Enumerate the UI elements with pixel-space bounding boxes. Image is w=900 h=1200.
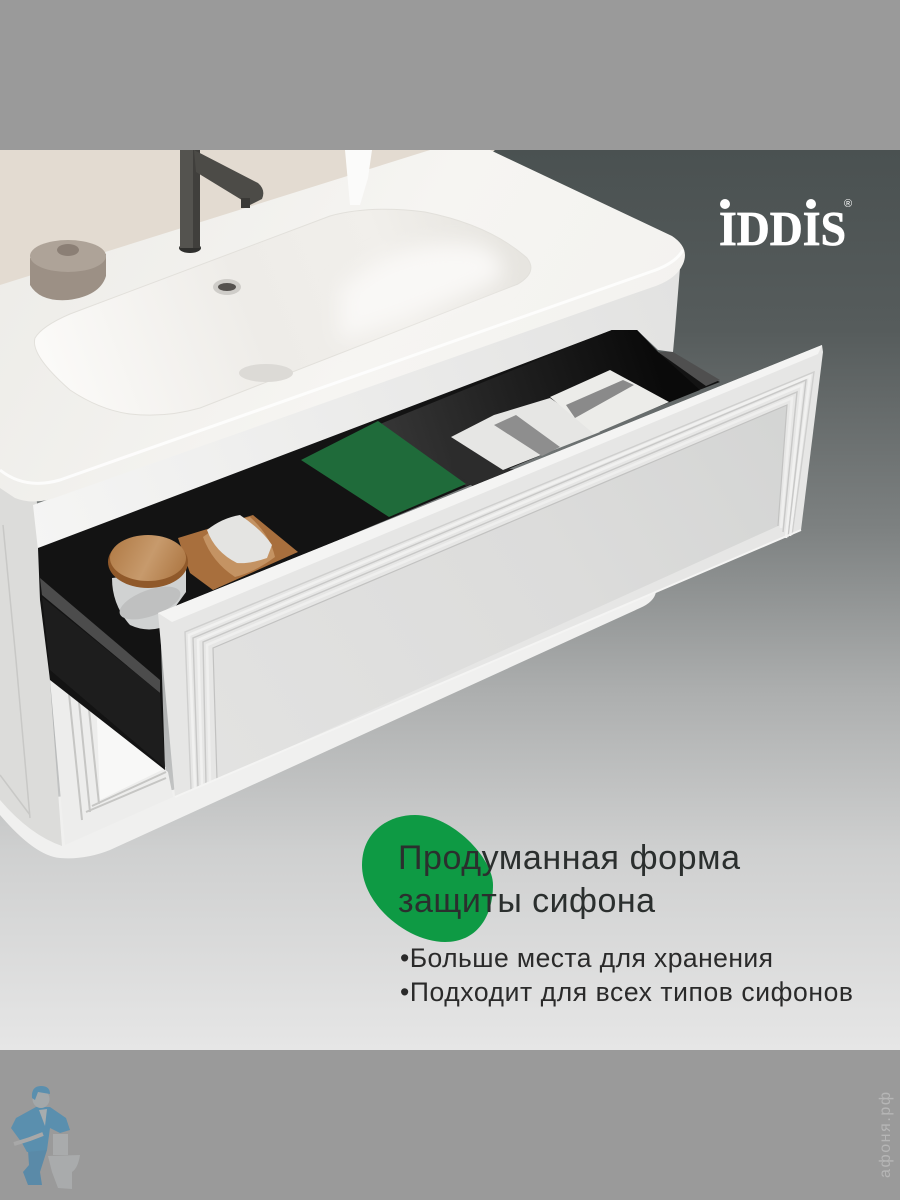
plumber shirt (39, 1109, 47, 1126)
bullet list (400, 943, 853, 1007)
towels (451, 370, 669, 492)
drawer side runner (40, 578, 160, 693)
icon: plumber with toilet (11, 1086, 80, 1189)
cabinet base shelf (0, 578, 656, 858)
bullet 1: •Больше места для хранения (400, 943, 773, 973)
green blob (362, 815, 493, 942)
back wall of drawer (380, 330, 700, 486)
drawer interior (38, 330, 720, 770)
wrench (14, 1134, 43, 1144)
top lip (158, 345, 822, 622)
counter front edge highlight (0, 250, 683, 483)
overflow (213, 279, 241, 295)
plumber head (32, 1086, 50, 1108)
heading line 2: защиты сифона (398, 882, 655, 920)
right runner (658, 352, 720, 386)
white faucet (345, 150, 372, 205)
top gray band (0, 0, 900, 150)
hair brush (203, 515, 275, 577)
storage jar (108, 535, 188, 629)
carcass band (33, 268, 680, 550)
drawer side (42, 597, 165, 768)
green divider (301, 421, 466, 517)
bullet 2: •Подходит для всех типов сифонов (400, 977, 853, 1007)
logo: IDDIS (719, 198, 852, 256)
wash basin (34, 209, 531, 415)
logo dot right (806, 199, 816, 209)
toilet (48, 1134, 80, 1189)
taupe container (30, 240, 106, 300)
bottom gray band (0, 1050, 900, 1200)
cabinet side panel (0, 470, 62, 846)
plumber jacket (11, 1107, 70, 1152)
photo background (0, 150, 900, 1050)
drain (239, 364, 293, 382)
mouldings (185, 372, 814, 790)
basin inner shading (340, 243, 502, 340)
drawer front (158, 345, 823, 797)
heading line 1: Продуманная форма (398, 839, 740, 877)
inner panel (213, 405, 787, 780)
registered mark: ® (844, 198, 852, 210)
plumber legs (23, 1150, 47, 1185)
countertop (0, 150, 685, 502)
wooden tray (178, 515, 298, 590)
front body (158, 345, 823, 797)
vanity photo illustration (0, 150, 823, 858)
logo wordmark: IDDIS (719, 201, 846, 256)
watermark: афоня.рф (877, 1092, 894, 1178)
logo dot left (720, 199, 730, 209)
lower drawer (50, 680, 173, 845)
front bottom edge (175, 530, 801, 797)
faucet (179, 150, 263, 253)
wall (0, 150, 495, 300)
heading (398, 839, 740, 920)
